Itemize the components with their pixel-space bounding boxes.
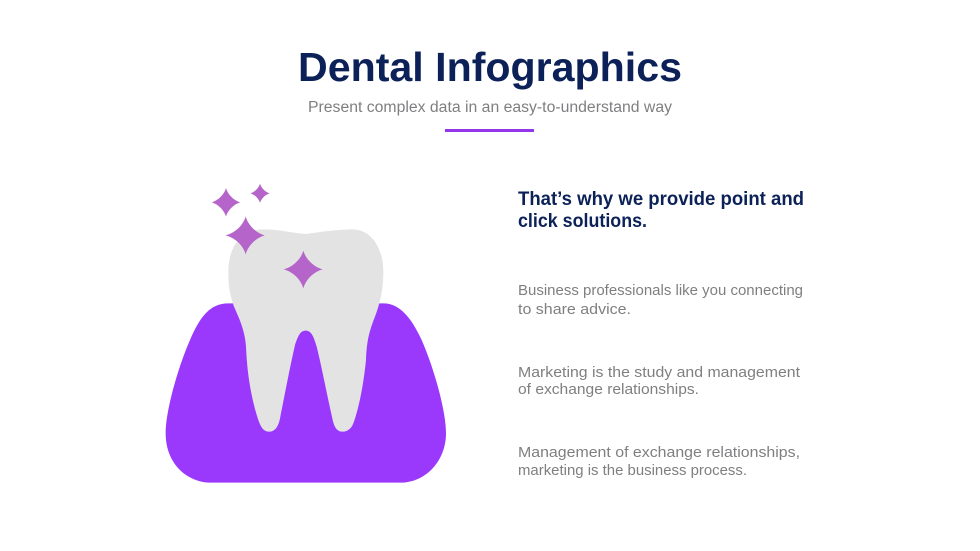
- illustration: tooth in gum: [166, 184, 446, 483]
- title underline: [445, 129, 534, 132]
- text block: management: marketing is the business process.: [518, 462, 747, 479]
- icon: sparkle on tooth: [284, 251, 323, 288]
- heading text: That’s why we provide point and: [518, 189, 804, 210]
- text block: marketing: [518, 364, 801, 398]
- text block: management: [518, 444, 800, 479]
- icon: sparkle top left: [212, 188, 240, 217]
- icon: sparkle middle: [225, 216, 265, 254]
- text block: business professionals: Business professionals like you connecting: [518, 282, 803, 299]
- heading text: [518, 189, 804, 232]
- tooth: [228, 229, 383, 432]
- title: Dental Infographics: [298, 44, 682, 90]
- text block: marketing: of exchange relationships.: [518, 381, 699, 398]
- heading text: click solutions.: [518, 211, 647, 232]
- subtitle: Present complex data in an easy-to-understand way: [308, 99, 672, 116]
- text block: business professionals: [518, 282, 803, 318]
- gum: [166, 303, 446, 483]
- icon: sparkle top right: [250, 184, 270, 203]
- text block: business professionals: to share advice.: [518, 301, 631, 318]
- text block: management: Management of exchange relationships,: [518, 444, 800, 461]
- text block: marketing: Marketing is the study and management: [518, 364, 801, 381]
